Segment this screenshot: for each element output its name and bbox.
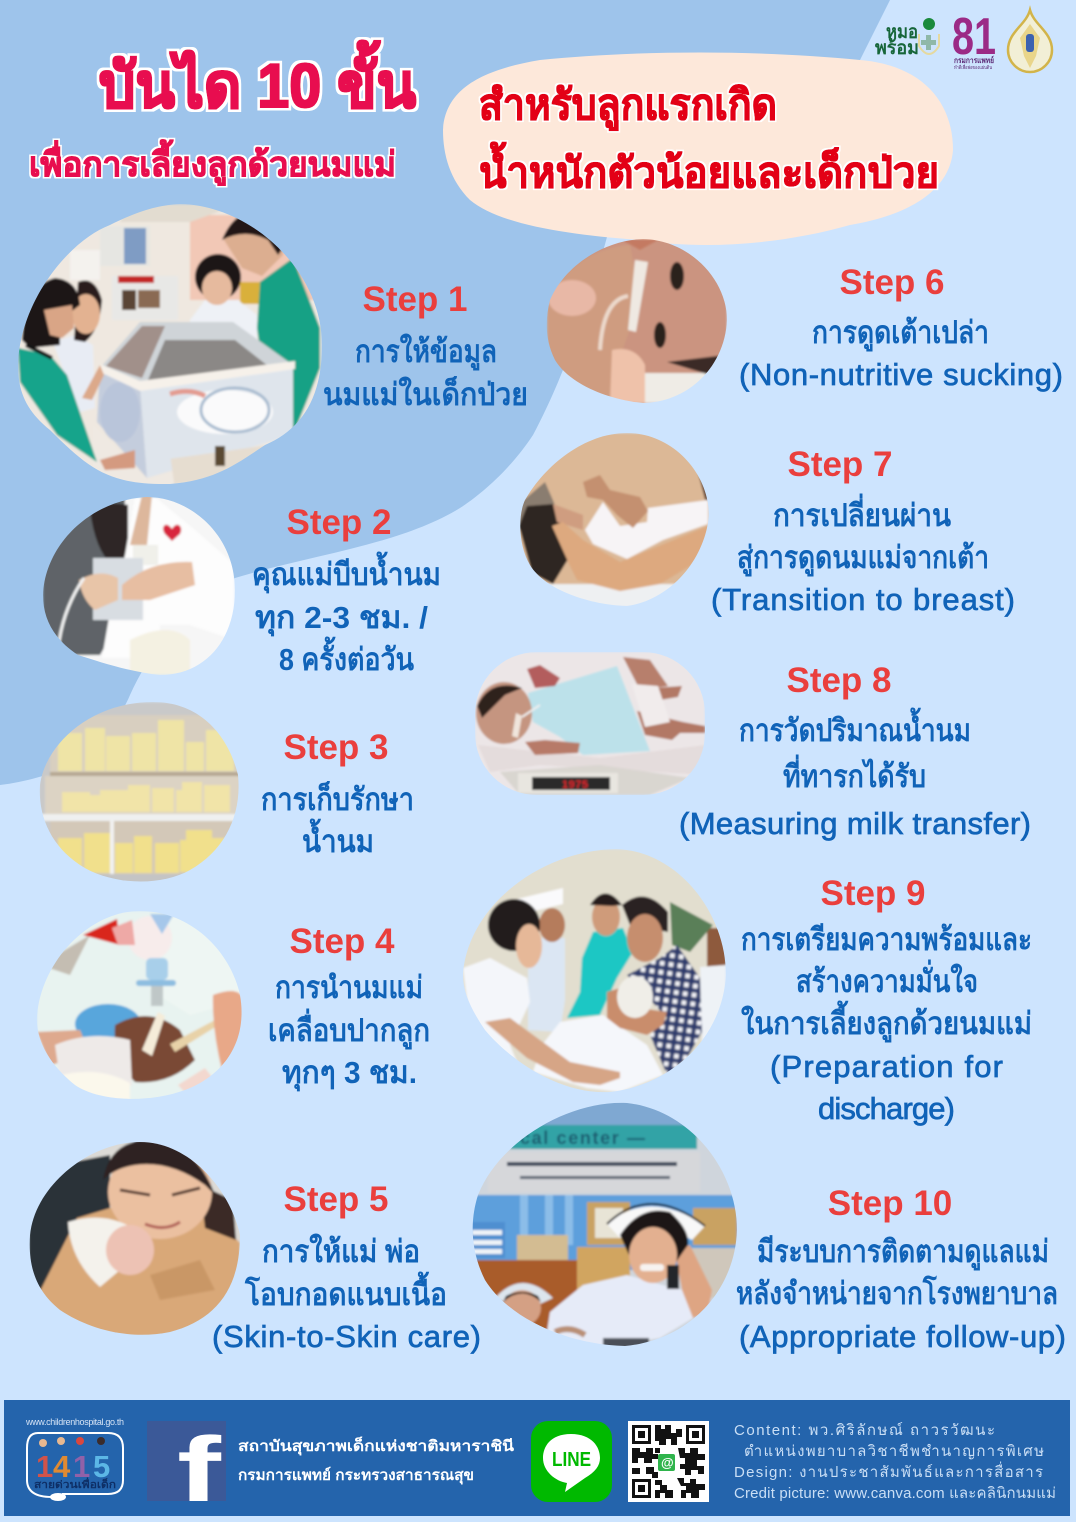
credits text: Design: งานประชาสัมพันธ์และการสื่อสาร — [734, 1461, 1043, 1481]
step 5 label — [212, 1180, 481, 1354]
step 8 label: Step 8 — [786, 661, 892, 700]
step 10 photo: nurse follow-up — [470, 1100, 738, 1350]
title: บันได 10 ขั้น — [99, 40, 416, 121]
facebook icon: f — [177, 1419, 222, 1521]
step 5 label: โอบกอดแนบเนื้อ — [244, 1271, 447, 1312]
facebook icon — [147, 1419, 226, 1521]
subtitle in peach blob: สำหรับลูกแรกเกิด — [479, 81, 777, 131]
step 6 label: (Non-nutritive sucking) — [739, 357, 1063, 392]
peach title blob — [443, 52, 953, 245]
step 8 label: การวัดปริมาณน้ำนม — [739, 707, 971, 748]
hospital name: สถาบันสุขภาพเด็กแห่งชาติมหาราชินี — [238, 1436, 515, 1456]
subtitle in peach blob: น้ำหนักตัวน้อยและเด็กป่วย — [479, 141, 939, 196]
step 9 label: Step 9 — [820, 874, 926, 913]
step 2 label: คุณแม่บีบน้ำนม — [252, 551, 441, 594]
footer bar — [4, 1400, 1070, 1521]
step 8 label — [679, 661, 1031, 841]
hospital name — [238, 1436, 515, 1485]
step 2 photo: pumping milk — [43, 495, 235, 675]
hospital logo — [25, 1417, 124, 1501]
LINE icon — [531, 1421, 612, 1502]
hospital logo: 1 — [36, 1449, 53, 1484]
hospital logo: www.childrenhospital.go.th — [25, 1417, 124, 1427]
step 2 label: ทุก 2-3 ชม. / — [255, 600, 428, 637]
step 4 label: เคลื่อบปากลูก — [268, 1008, 430, 1050]
logo: 81 years: 81 — [952, 8, 996, 66]
step 3 label: การเก็บรักษา — [261, 780, 414, 817]
credits text: Credit picture: www.canva.com และคลินิกนมแม่ — [734, 1485, 1056, 1502]
logo: royal emblem — [1008, 10, 1052, 72]
step 8 photo: baby on scale — [475, 652, 705, 795]
step 7 label — [711, 445, 1015, 617]
step 4 photo: oral colostrum care — [37, 911, 243, 1102]
step 5 label: Step 5 — [283, 1180, 389, 1219]
QR code: @ — [661, 1455, 674, 1470]
LINE icon: LINE — [552, 1449, 591, 1471]
left woman — [18, 348, 97, 462]
step 4 label — [268, 922, 430, 1092]
logo: doctor ready: พร้อม — [875, 37, 919, 59]
step 1 photo: team at incubator — [18, 204, 322, 490]
hospital logo: 1 — [73, 1449, 90, 1484]
step 5 photo: skin to skin — [29, 1140, 241, 1340]
hands — [82, 365, 104, 400]
incubator — [100, 322, 293, 385]
step 6 label — [739, 263, 1063, 392]
step 9 label: discharge) — [818, 1091, 955, 1126]
hospital logo: 4 — [53, 1449, 71, 1484]
step 10 label: Step 10 — [828, 1184, 952, 1223]
subtitle in peach blob — [479, 81, 939, 196]
step 6 photo: non-nutritive sucking — [547, 239, 727, 404]
hospital logo: 5 — [93, 1449, 110, 1484]
step 9 label: ในการเลี้ยงลูกด้วยนมแม่ — [741, 1000, 1032, 1043]
hospital logo: สายด่วนเพื่อเด็ก — [34, 1477, 116, 1491]
step 4 label: Step 4 — [289, 922, 395, 961]
step 8 label: (Measuring milk transfer) — [679, 806, 1031, 841]
step 8 label: ที่ทารกได้รับ — [783, 754, 926, 794]
step 1 label: นมแม่ในเด็กป่วย — [323, 375, 528, 412]
step 9 photo: preparation for discharge — [462, 849, 726, 1093]
step 9 label: (Preparation for — [770, 1049, 1003, 1084]
title — [29, 40, 416, 186]
step 4 label: การนำนมแม่ — [275, 970, 423, 1005]
step 3 label — [261, 728, 414, 859]
step 7 photo: transition to breast — [519, 433, 712, 607]
step 1 label: Step 1 — [362, 280, 468, 319]
credits text — [734, 1422, 1056, 1502]
logo: 81 years: กรมการแพทย์ — [954, 55, 994, 65]
step 9 label: สร้างความมั่นใจ — [796, 959, 978, 999]
step 6 label: Step 6 — [839, 263, 945, 302]
hospital name: กรมการแพทย์ กระทรวงสาธารณสุข — [238, 1466, 474, 1485]
credits text: ตำแหน่งพยาบาลวิชาชีพชำนาญการพิเศษ — [744, 1443, 1044, 1460]
logo: doctor ready — [875, 18, 939, 59]
second woman — [53, 335, 95, 412]
nurse behind — [190, 300, 258, 338]
man in green — [257, 258, 320, 435]
step 10 label — [736, 1184, 1066, 1354]
step 1 label: การให้ข้อมูล — [355, 333, 497, 371]
step 2 label — [252, 503, 441, 677]
logo: 81 years: ทำดีเพื่อพ่อของแผ่นดิน — [954, 64, 992, 71]
step 3 label: Step 3 — [283, 728, 389, 767]
QR code — [628, 1421, 709, 1502]
step 6 label: การดูดเต้าเปล่า — [812, 315, 989, 352]
step 7 label: การเปลี่ยนผ่าน — [773, 493, 951, 533]
step 4 label: ทุกๆ 3 ชม. — [282, 1055, 417, 1092]
step 3 photo: milk bags on shelves — [39, 702, 241, 888]
logo: doctor ready: หมอ — [886, 22, 918, 43]
dark blue background blob — [0, 0, 890, 785]
step 7 label: (Transition to breast) — [711, 582, 1015, 617]
step 8 photo: baby on scale: 1975 — [562, 779, 588, 791]
step 5 label: การให้แม่ พ่อ — [262, 1233, 420, 1269]
step 3 label: น้ำนม — [302, 818, 374, 859]
step 10 label: (Appropriate follow-up) — [739, 1319, 1066, 1354]
step 9 label — [741, 874, 1032, 1126]
step 1 label — [323, 280, 528, 412]
credits text: Content: พว.ศิริลักษณ์ ถาวรวัฒนะ — [734, 1422, 995, 1439]
logos top right — [875, 8, 1052, 72]
step 7 label: สู่การดูดนมแม่จากเต้า — [737, 540, 989, 577]
step 2 label: Step 2 — [286, 503, 392, 542]
step 5 label: (Skin-to-Skin care) — [212, 1319, 481, 1354]
step 7 label: Step 7 — [787, 445, 893, 484]
step 10 photo: nurse follow-up: cal center — — [520, 1128, 645, 1148]
step 2 label: 8 ครั้งต่อวัน — [279, 636, 414, 677]
title: เพื่อการเลี้ยงลูกด้วยนมแม่ — [29, 139, 396, 186]
